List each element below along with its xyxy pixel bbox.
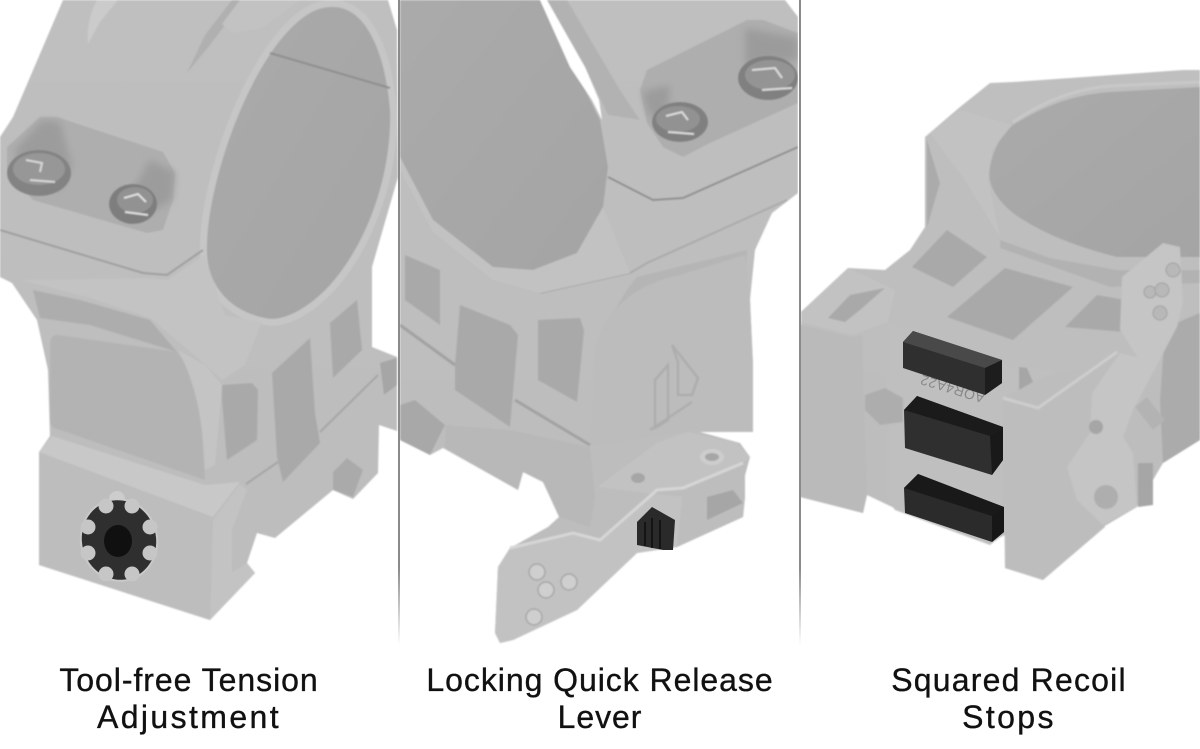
front clamp block (1003, 353, 1135, 580)
rail seam (400, 325, 590, 445)
clamp block face (39, 458, 210, 620)
rim crown line (1013, 82, 1200, 122)
panel: squared recoil stops photo (800, 70, 1200, 580)
window 1 (538, 318, 584, 402)
recessed side panel (50, 335, 205, 480)
panel: tool-free tension adjustment photo (0, 0, 398, 620)
white slit (540, 0, 602, 120)
pivot (700, 449, 724, 465)
divider left (398, 0, 400, 645)
logo mark (650, 345, 698, 430)
window 3 (1065, 295, 1125, 332)
caption: squared recoil stops: Squared Recoil (891, 662, 1127, 698)
left clamp top (801, 268, 895, 335)
ring bore (989, 87, 1200, 257)
rear lever tab (380, 358, 397, 395)
lever screws (1089, 420, 1103, 434)
lower facet (188, 370, 199, 404)
lever plate (495, 432, 750, 643)
ring bore (400, 0, 608, 270)
left clamp face (800, 325, 867, 513)
right body face (590, 255, 753, 447)
left ring segment (930, 110, 1012, 237)
panel: locking quick release lever photo (400, 0, 798, 643)
caption: locking quick release lever: Lever (558, 699, 642, 735)
window 2 (455, 305, 518, 427)
caption: tool-free tension adjustment: Adjustment (97, 699, 281, 735)
recoil stop top (903, 331, 1002, 395)
recoil stop middle (904, 396, 1003, 475)
recoil stop bottom (904, 474, 1004, 542)
hex bumps (526, 564, 577, 625)
divider right (799, 0, 801, 645)
screw left (7, 150, 71, 196)
rail slot (400, 400, 445, 455)
screw recess (7, 117, 175, 233)
lower rim highlight (540, 272, 630, 293)
ring mount silhouette (801, 70, 1200, 580)
clamp lower (445, 425, 595, 527)
right body recess (622, 252, 746, 302)
central recess (888, 322, 1060, 545)
top highlight streak (88, 0, 116, 41)
window 2 (272, 338, 320, 482)
clamp seam (608, 147, 798, 200)
rim band (547, 0, 640, 120)
bore seam (270, 53, 390, 88)
clamp block top (39, 436, 240, 517)
lower band (20, 255, 262, 380)
side of ring shaded (927, 140, 940, 227)
caption: squared recoil stops: Stops (962, 699, 1056, 735)
screw shadows (15, 120, 175, 215)
rim band around bore (218, 210, 374, 320)
engraved model mark: AOR4A22 (918, 372, 986, 406)
rear shaded ring body (1160, 313, 1200, 463)
window 3 (330, 300, 362, 378)
left slot (828, 288, 885, 322)
ring bore (207, 7, 390, 319)
lever fork (677, 463, 745, 547)
window 1 (912, 230, 987, 287)
window 3 (405, 255, 440, 325)
lever slot (1138, 463, 1153, 507)
icon: black lever switch (637, 507, 675, 550)
screw shadows (642, 28, 798, 118)
window 2 (947, 268, 1073, 340)
window 1 (222, 383, 258, 460)
ring lower arc (540, 200, 787, 293)
bolt (865, 388, 903, 425)
screw one (652, 102, 708, 142)
ring mount silhouette (0, 0, 398, 620)
screw right (109, 184, 157, 224)
screw recess (640, 20, 798, 157)
icon: tension knob (80, 491, 158, 582)
lever (1067, 243, 1183, 525)
screw two (738, 56, 798, 100)
rim facet (222, 0, 244, 26)
ring mount silhouette (400, 0, 798, 546)
lever dimples (1144, 263, 1180, 320)
lever thumb tab (1135, 397, 1165, 430)
lever link window (707, 490, 743, 520)
small triangle mark (1019, 367, 1033, 390)
dark strip (33, 290, 177, 352)
dovetail side (210, 484, 255, 620)
dark groove (190, 0, 238, 69)
caption: locking quick release lever: Locking Quick Release (426, 662, 774, 698)
rail slot (333, 458, 363, 497)
lower rim band (1000, 240, 1200, 287)
clamp seam (0, 230, 203, 275)
caption: tool-free tension adjustment: Tool-free Tension (59, 662, 319, 698)
